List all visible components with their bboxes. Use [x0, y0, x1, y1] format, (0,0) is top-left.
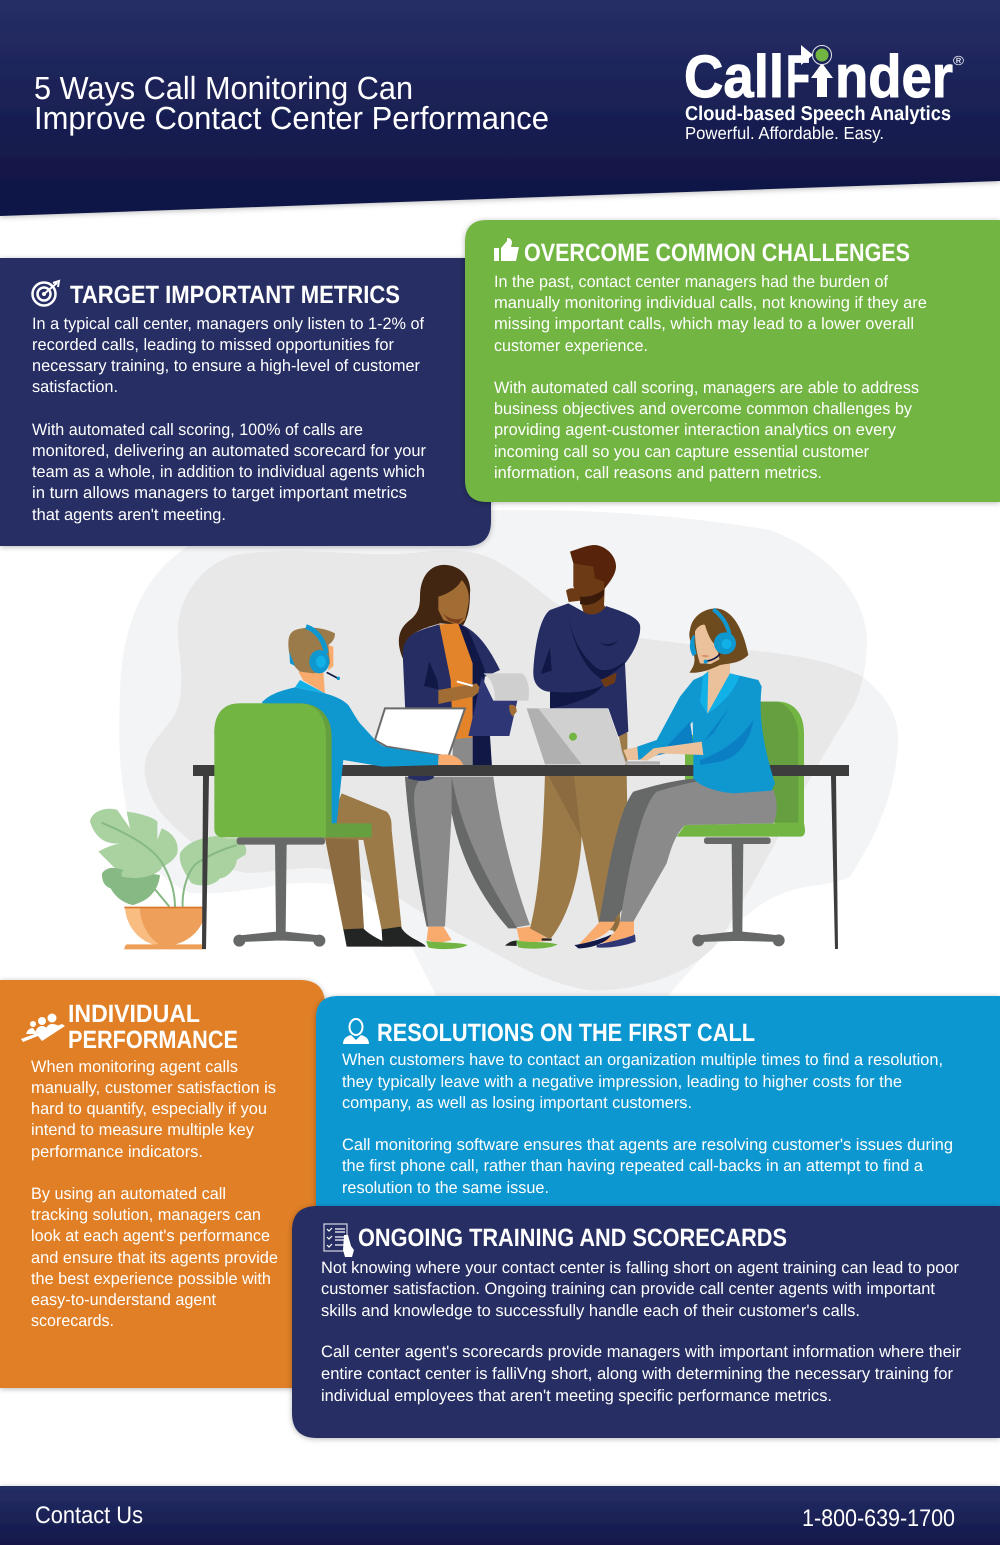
body text: When monitoring agent calls [31, 1058, 238, 1076]
body text: look at each agent's performance [31, 1227, 270, 1245]
body text: Call monitoring software ensures that agents are resolving customer's issues during [342, 1136, 953, 1154]
body text: business objectives and overcome common challenges by [494, 400, 913, 418]
icon: people on rising arrow [21, 1014, 65, 1042]
body text: they typically leave with a negative impression, leading to higher costs for the [342, 1073, 902, 1091]
body text: and ensure that its agents provide [31, 1249, 278, 1267]
icon: target [32, 281, 59, 306]
phone number: 1-800-639-1700 [802, 1505, 955, 1532]
body text: recorded calls, leading to missed opportunities for [32, 336, 394, 354]
contact label: Contact Us [35, 1502, 143, 1529]
heading: TARGET IMPORTANT METRICS [70, 281, 400, 309]
body text: With automated call scoring, managers are able to address [494, 379, 919, 397]
heading: ONGOING TRAINING AND SCORECARDS [358, 1224, 787, 1252]
body text: providing agent-customer interaction analytics on every [494, 421, 897, 439]
body text: skills and knowledge to successfully handle each of their customer's calls. [321, 1302, 860, 1320]
body text [494, 273, 927, 482]
body text: customer experience. [494, 337, 648, 355]
body text: necessary training, to ensure a high-level of customer [32, 357, 420, 375]
body text: hard to quantify, especially if you [31, 1100, 267, 1118]
body text: intend to measure multiple key [31, 1121, 255, 1139]
panel: target important metrics [0, 258, 491, 546]
CallFinder logo: Powerful. Affordable. Easy. [685, 123, 884, 143]
heading: PERFORMANCE [68, 1026, 238, 1054]
heading: RESOLUTIONS ON THE FIRST CALL [377, 1019, 755, 1047]
body text: the first phone call, rather than having repeated call-backs in an attempt to find a [342, 1157, 924, 1175]
body text: In the past, contact center managers had the burden of [494, 273, 888, 291]
figure: standing woman with clipboard [399, 565, 530, 949]
body text: information, call reasons and pattern metrics. [494, 464, 822, 482]
body text: manually monitoring individual calls, not knowing if they are [494, 294, 927, 312]
chair behind seated woman [677, 702, 805, 946]
figure: seated woman with headset [574, 608, 777, 948]
body text: scorecards. [31, 1312, 114, 1330]
heading: OVERCOME COMMON CHALLENGES [524, 239, 910, 267]
body text [31, 1058, 278, 1330]
body text: In a typical call center, managers only listen to 1-2% of [32, 315, 424, 333]
header band [0, 0, 1000, 216]
body text [342, 1051, 953, 1197]
body text: With automated call scoring, 100% of calls are [32, 421, 363, 439]
CallFinder logo: Cloud-based Speech Analytics [685, 103, 951, 125]
CallFinder logo: ® [953, 53, 964, 68]
body text: incoming call so you can capture essential customer [494, 443, 869, 461]
CallFinder logo: Call [684, 43, 784, 110]
body text [321, 1259, 962, 1405]
figure: laptops on the desk [375, 708, 660, 765]
heading [68, 1000, 238, 1054]
body text: resolution to the same issue. [342, 1179, 549, 1197]
body text: in turn allows managers to target important metrics [32, 484, 407, 502]
body text: easy-to-understand agent [31, 1291, 216, 1309]
icon: checklist with pointing hand [324, 1224, 354, 1257]
body text [32, 315, 426, 524]
figure: seated man with headset and green chair [214, 627, 463, 947]
body text: Not knowing where your contact center is falling short on agent training can lead to poor [321, 1259, 960, 1277]
footer band [0, 1486, 1000, 1545]
body text: entire contact center is falliVng short, along with determining the necessary training for [321, 1365, 954, 1383]
icon: agent with headset [343, 1019, 369, 1044]
CallFinder logo [684, 43, 964, 143]
icon: potted plant [90, 809, 246, 949]
panel: individual performance [0, 980, 325, 1388]
body text: that agents aren't meeting. [32, 506, 226, 524]
body text: satisfaction. [32, 378, 118, 396]
body text: By using an automated call [31, 1185, 226, 1203]
panel: ongoing training and scorecards [292, 1206, 1000, 1438]
panel: overcome common challenges [465, 220, 1000, 502]
title: Improve Contact Center Performance [34, 100, 549, 136]
illustration backdrop blobs [119, 510, 898, 997]
title: 5 Ways Call Monitoring Can [34, 70, 413, 106]
body text: monitored, delivering an automated scorecard for your [32, 442, 426, 460]
body text: When customers have to contact an organization multiple times to find a resolution, [342, 1051, 943, 1069]
body text: missing important calls, which may lead to a lower overall [494, 315, 914, 333]
heading: INDIVIDUAL [68, 1000, 200, 1028]
CallFinder logo: nder [835, 43, 953, 110]
body text: individual employees that aren't meeting specific performance metrics. [321, 1387, 832, 1405]
body text: team as a whole, in addition to individual agents which [32, 463, 425, 481]
panel: resolutions on the first call [316, 996, 1000, 1215]
body text: Call center agent's scorecards provide managers with important information where their [321, 1343, 962, 1361]
title [34, 70, 549, 136]
figure: desk [193, 765, 849, 949]
icon: thumbs up [494, 238, 519, 261]
body text: customer satisfaction. Ongoing training can provide call center agents with important [321, 1280, 935, 1298]
body text: company, as well as losing important customers. [342, 1094, 692, 1112]
body text: manually, customer satisfaction is [31, 1079, 276, 1097]
body text: the best experience possible with [31, 1270, 271, 1288]
figure: standing man with navy sweater [505, 545, 640, 949]
CallFinder logo: F [786, 43, 810, 110]
body text: performance indicators. [31, 1143, 203, 1161]
body text: tracking solution, managers can [31, 1206, 261, 1224]
